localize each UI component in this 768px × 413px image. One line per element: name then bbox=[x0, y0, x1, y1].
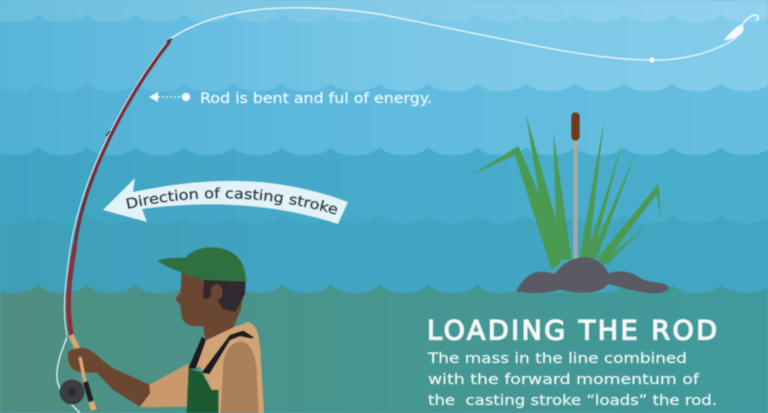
rod lower handle bbox=[80, 357, 94, 410]
rod guide bbox=[106, 131, 110, 136]
direction of casting stroke arrow: Direction of casting stroke bbox=[126, 186, 338, 215]
cattail head bbox=[571, 112, 580, 141]
fishing rod bbox=[57, 39, 172, 413]
heading: loading the rod: LOADING THE ROD bbox=[427, 316, 717, 346]
fly line bbox=[170, 8, 737, 60]
waders bbox=[187, 368, 218, 413]
shirt bbox=[195, 322, 264, 413]
neck and head bbox=[175, 272, 246, 341]
icon: fly lure bbox=[724, 15, 758, 40]
fisherman bbox=[68, 247, 264, 413]
sleeve bbox=[140, 363, 189, 407]
hair bbox=[203, 279, 246, 312]
body text: The mass in the line combined bbox=[427, 351, 687, 367]
cap bbox=[157, 247, 246, 282]
rod butt bbox=[91, 402, 94, 410]
rod grip bbox=[86, 382, 91, 401]
cattail stem bbox=[573, 139, 578, 259]
body text: the casting stroke “loads” the rod. bbox=[428, 393, 717, 409]
cattail plant bbox=[472, 112, 669, 293]
arm and hand bbox=[68, 348, 150, 407]
rod upper handle bbox=[71, 335, 78, 350]
direction of casting stroke arrow bbox=[102, 178, 348, 224]
straps bbox=[188, 331, 254, 374]
reel line bbox=[57, 337, 80, 413]
callout arrow: rod energy bbox=[149, 92, 190, 102]
reeds bbox=[472, 146, 562, 270]
body text: with the forward momentum of bbox=[428, 372, 700, 388]
shirt shading bbox=[221, 342, 259, 413]
callout text: rod is bent: Rod is bent and ful of energy. bbox=[200, 91, 432, 107]
line knot bbox=[649, 57, 655, 63]
rock mound bbox=[516, 257, 669, 293]
body text bbox=[427, 351, 717, 409]
fishing reel bbox=[60, 380, 84, 404]
ear bbox=[211, 284, 223, 300]
